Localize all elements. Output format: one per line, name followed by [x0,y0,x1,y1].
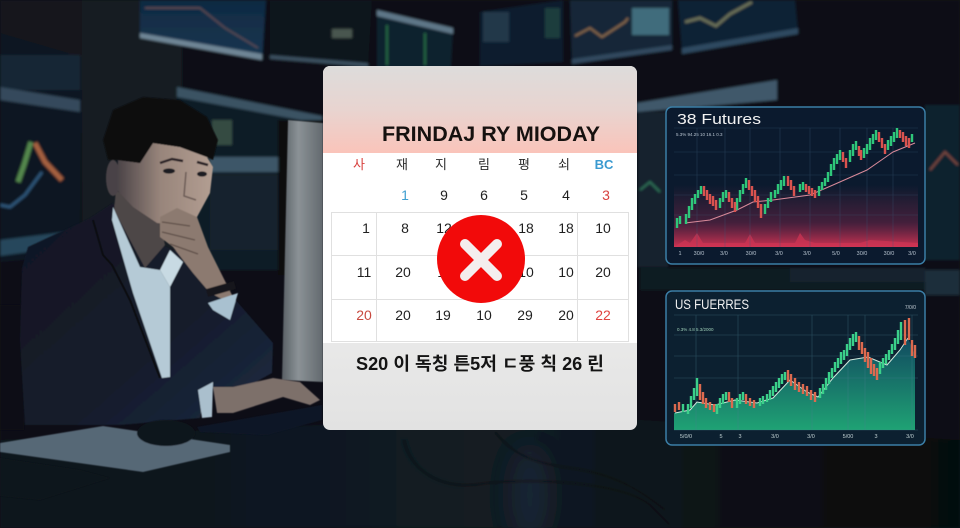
weekday labels: 림 [478,157,490,172]
volume area [674,185,918,247]
x axis labels: 30/0 [884,251,894,257]
shirt cuff [208,293,238,320]
panel frame [666,291,925,445]
calendar card [323,66,637,430]
x axis labels: 5/0 [832,251,840,257]
candlesticks falling [704,130,909,218]
x axis labels [678,251,916,257]
jacket [20,203,273,425]
hand on keyboard [213,378,320,413]
calendar dates: 20 [356,307,372,323]
x axis labels: 3/0 [807,434,815,440]
x axis labels: 3/0 [720,251,728,257]
shirt collar [160,250,183,287]
x axis labels: 5/00 [843,434,853,440]
calendar dates: 9 [440,187,448,203]
weekday labels: 쇠 [558,157,570,172]
x axis labels: 3/0 [906,434,914,440]
x axis labels: 1 [678,251,682,257]
weekday labels [353,157,614,172]
calendar dates: 19 [435,307,451,323]
candlesticks rising [677,128,912,228]
x axis labels: 30/0 [746,251,756,257]
candlesticks rising [683,322,901,414]
calendar dates: 12 [436,220,452,236]
weekday labels: 평 [518,157,530,172]
panel: top futures chart [666,107,925,264]
chair [0,305,24,430]
calendar dates: 10 [595,220,611,236]
neck [114,190,165,268]
x axis labels: 3 [738,434,742,440]
grid lines [674,315,918,430]
calendar dates: 5 [520,187,528,203]
calendar dates: 1 [401,187,409,203]
calendar dates: 20 [395,307,411,323]
background monitor behind person [177,87,322,275]
calendar dates: 6 [480,187,488,203]
volume spikes [674,233,918,247]
calendar dates: 1 [362,220,370,236]
person: worried trader [0,97,320,430]
calendar dates: 10 [476,307,492,323]
panel top-right label: 7/0/0 [905,305,916,311]
calendar dates: 29 [517,307,533,323]
background monitors top row [140,0,798,112]
jacket lapel [93,220,160,378]
calendar grid [331,212,629,342]
calendar dates: 18 [558,220,574,236]
x axis labels: 5/0/0 [680,434,692,440]
x axis labels: 3/0 [803,251,811,257]
x axis labels: 3 [874,434,878,440]
weekday labels: 지 [435,157,447,172]
moving average line [685,143,915,223]
second keyboard foreground [0,458,110,500]
keyboard [197,405,322,435]
hand at chin [160,208,233,303]
calendar caption: S20 이 독칭 튼5저 ㄷ풍 칙 26 린 [356,354,604,374]
desk items [0,405,322,500]
wristwatch [207,285,235,293]
panel subtitle: 0.3% 4.8 5.3/2000 [677,327,714,332]
x axis labels: 30/0 [694,251,704,257]
panel frame [666,107,925,264]
weekday labels: BC [595,157,614,172]
calendar dates: 4 [562,187,570,203]
calendar dates: 20 [558,307,574,323]
lower sleeve cuff [198,382,213,418]
x axis labels: 3/0 [908,251,916,257]
x axis labels: 30/0 [857,251,867,257]
panel title: US FUERRES [675,296,749,312]
x axis labels: 5 [719,434,723,440]
candlesticks falling [675,318,915,412]
calendar dates: 19 [437,264,453,280]
x axis labels [680,434,914,440]
calendar dates: 20 [395,264,411,280]
calendar dates: 18 [518,220,534,236]
notebook [0,426,230,472]
computer monitor side [282,120,323,382]
x axis labels: 3/0 [771,434,779,440]
face [117,143,213,225]
calendar dates: 10 [558,264,574,280]
panel: US futures chart [666,291,925,445]
eyebrows, eyes and nose [160,159,208,200]
hair [103,97,218,163]
ear [106,160,120,196]
background monitors right [638,105,960,295]
desk cables [404,432,670,525]
calendar dates: 20 [595,264,611,280]
calendar dates: 3 [602,187,610,203]
calendar body [323,153,637,343]
finger creases [162,222,198,254]
calendar dates [356,187,611,323]
calendar dates: 10 [518,264,534,280]
calendar dates: 11 [357,264,371,280]
calendar dates: 8 [401,220,409,236]
background monitor left with chart [0,33,82,262]
calendar dates: 22 [595,307,611,323]
trend line [675,338,908,413]
card base [323,66,637,430]
desk surface [0,420,960,528]
x axis labels: 3/0 [775,251,783,257]
weekday labels: 사 [353,157,365,172]
grid lines [674,128,918,247]
shirt [112,207,170,378]
icon: red circle with white cross [437,215,525,303]
desk reflection [512,450,548,528]
calendar title: FRINDAJ RY MIODAY [382,123,600,146]
weekday labels: 재 [396,157,408,172]
panel subtitle: 5.3% 94.25 10 16.1 0.3 [676,132,723,137]
mouse [137,420,195,446]
card header [323,66,637,153]
panel title: 38 Futures [677,111,761,128]
area under curve [674,338,915,430]
